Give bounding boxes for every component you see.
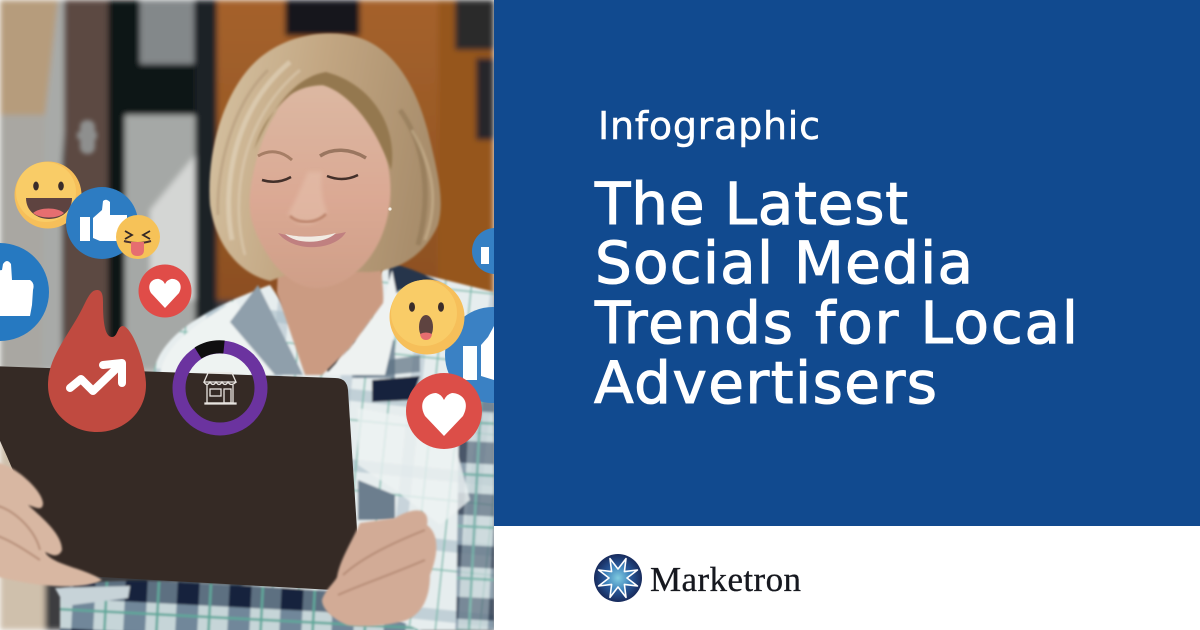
icon: surprised emoji	[390, 280, 464, 354]
panel: white footer	[494, 526, 1200, 630]
title: Trends for Local	[594, 289, 1078, 357]
panel: photo of woman with tablet	[0, 0, 494, 630]
woman: face	[250, 72, 392, 288]
icon: thumbs up badge, medium	[66, 187, 138, 259]
icon: heart badge small	[138, 264, 192, 318]
tablet	[0, 366, 358, 590]
woman: fringe and parting	[254, 72, 392, 170]
title: Advertisers	[594, 349, 937, 417]
icon: storefront	[204, 373, 236, 404]
title	[594, 170, 1078, 417]
title: The Latest	[594, 170, 908, 238]
right hand	[322, 510, 436, 626]
icon: laughing emoji	[14, 162, 82, 228]
left hand	[0, 462, 102, 586]
woman: shirt	[55, 262, 494, 630]
eyebrow: Infographic: Infographic	[598, 104, 820, 148]
title: Social Media	[595, 229, 973, 297]
woman: hair	[209, 33, 441, 281]
woman: neck	[277, 255, 383, 375]
shirt: upper right navy plaid	[388, 262, 445, 300]
photo background: blurred vehicle interior	[0, 0, 494, 630]
panel: blue title panel	[494, 0, 1200, 526]
icon: heart badge large	[406, 373, 482, 449]
icon: thumbs up badge, left edge	[0, 243, 49, 341]
door handle	[77, 120, 97, 154]
icon: flame with trending arrow	[48, 290, 146, 432]
icon: thumbs up badge, right large	[445, 307, 541, 403]
icon: thumbs up badge, right small	[472, 228, 518, 274]
logo mark	[594, 554, 642, 602]
logo: Marketron	[594, 554, 801, 602]
icon: tongue-out emoji	[116, 215, 160, 259]
logo wordmark: Marketron	[650, 560, 801, 599]
icon: progress ring with storefront	[179, 347, 261, 429]
